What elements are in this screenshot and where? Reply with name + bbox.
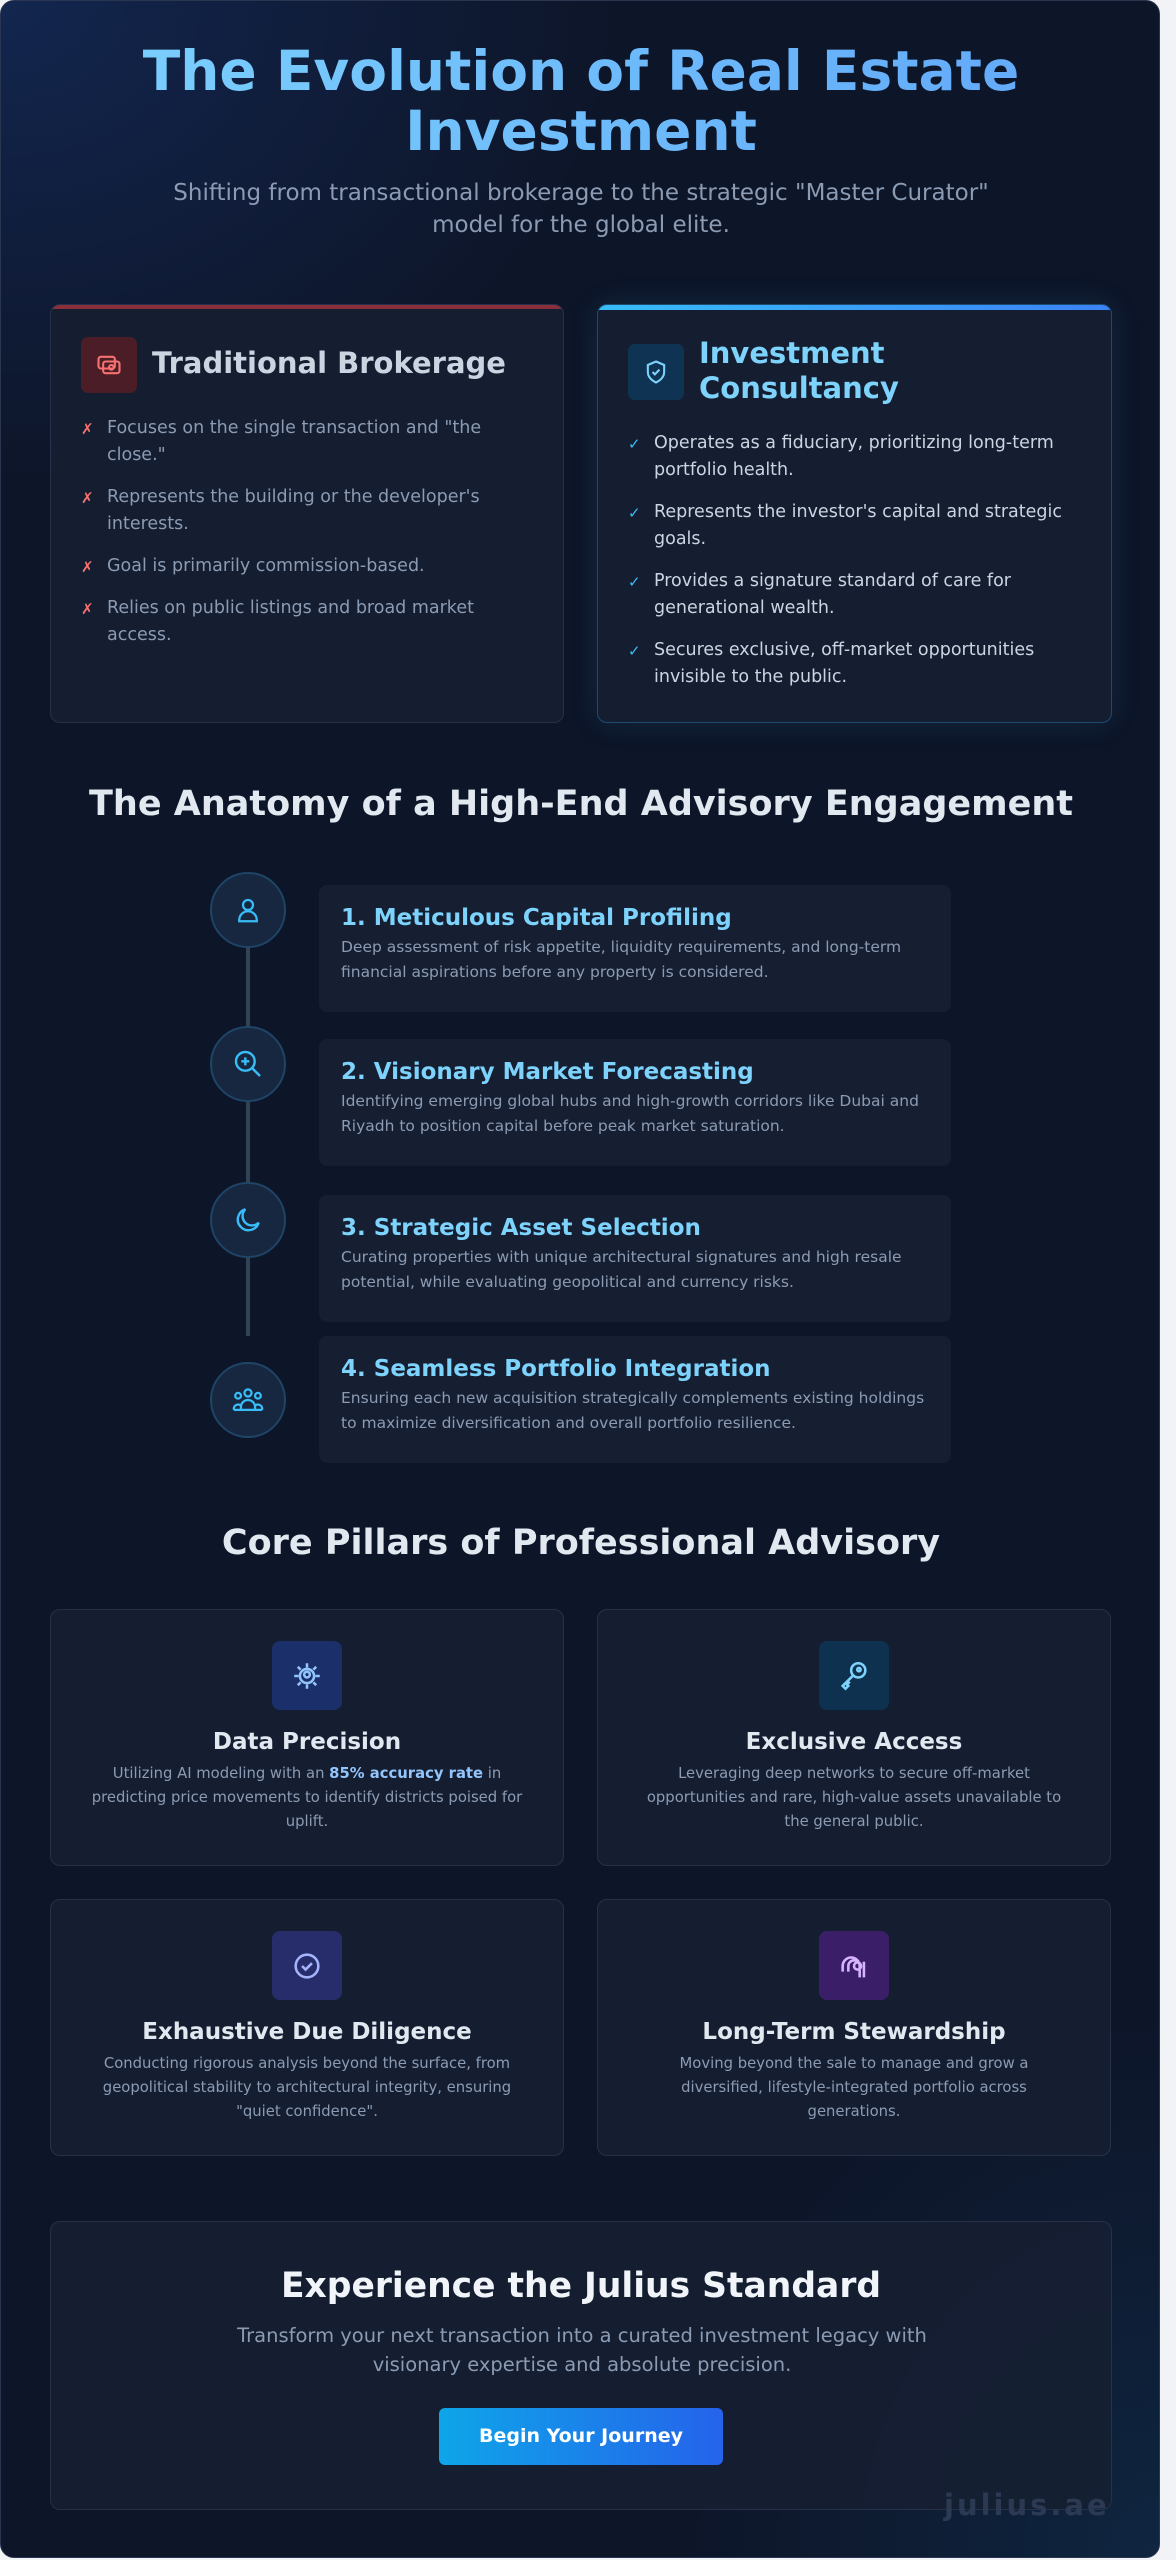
card (319, 1195, 951, 1322)
card: Curating properties with unique architectural signatures and high resale potential, while evaluating geopolitical and currency risks. (341, 1248, 902, 1290)
CTA heading: Experience the Julius Standard (281, 2266, 881, 2306)
list (81, 418, 481, 645)
card (319, 1336, 951, 1463)
list: ✗ (81, 489, 94, 507)
list: ✗ (81, 600, 94, 618)
list: ✓ (628, 573, 641, 591)
pillar: due diligence: geopolitical stability to architectural integrity, ensuring (103, 2079, 511, 2096)
button: Begin Your Journey (479, 2425, 683, 2447)
card: 2. Visionary Market Forecasting (341, 1059, 754, 1085)
card (319, 1039, 951, 1166)
list: Provides a signature standard of care for generational wealth. (654, 571, 1011, 618)
pillar: due diligence: Exhaustive Due Diligence (142, 2019, 472, 2045)
heading: core pillars: Core Pillars of Professional Advisory (222, 1523, 940, 1563)
pillar: stewardship: Long-Term Stewardship (702, 2019, 1006, 2045)
list: Relies on public listings and broad market access. (107, 598, 474, 645)
pillar: stewardship: diversified, lifestyle-integrated portfolio across (681, 2079, 1027, 2096)
list: Represents the building or the developer's interests. (107, 487, 480, 534)
step 2 (210, 1026, 951, 1166)
heading: anatomy: The Anatomy of a High-End Advisory Engagement (89, 784, 1073, 824)
title: Investment (405, 99, 757, 163)
pillar: due diligence (50, 1899, 564, 2156)
pillar: stewardship: generations. (808, 2103, 900, 2120)
heading: Traditional Brokerage (152, 346, 506, 380)
CTA text: Transform your next transaction into a curated investment legacy with visionary expertise and absolute precision. (237, 2324, 927, 2376)
list: ✓ (628, 435, 641, 453)
icon: cash (81, 337, 137, 393)
card: Deep assessment of risk appetite, liquidity requirements, and long-term financial aspirations before any property is considered. (341, 938, 901, 980)
title: The Evolution of Real Estate (143, 39, 1019, 103)
panel: traditional brokerage (50, 304, 564, 723)
title (1, 41, 1161, 161)
list: ✓ (628, 642, 641, 660)
list: Operates as a fiduciary, prioritizing long-term portfolio health. (654, 433, 1054, 480)
list: Focuses on the single transaction and "the close." (107, 418, 481, 465)
timeline line (246, 931, 250, 1336)
CTA panel (50, 2221, 1112, 2510)
icon: shield (628, 344, 684, 400)
step 4 (210, 1336, 951, 1463)
pillar: data precision: Data Precision (213, 1729, 401, 1755)
pillar: exclusive access: opportunities and rare, high-value assets unavailable to (647, 1789, 1061, 1806)
pillar: due diligence: "quiet confidence". (236, 2103, 378, 2120)
list: Represents the investor's capital and strategic goals. (654, 502, 1062, 549)
card (319, 885, 951, 1012)
panel: investment consultancy (597, 304, 1112, 723)
card: 3. Strategic Asset Selection (341, 1215, 701, 1241)
watermark: julius.ae (944, 2488, 1110, 2522)
pillar: exclusive access: the general public. (784, 1813, 924, 1830)
icon: user (210, 872, 286, 948)
icon: zoom (210, 1026, 286, 1102)
step 3 (210, 1182, 951, 1322)
pillar: data precision: predicting price movements to identify districts poised for (92, 1789, 522, 1806)
icon: key (819, 1641, 889, 1710)
card: Identifying emerging global hubs and high-growth corridors like Dubai and Riyadh to position capital before peak market saturation. (341, 1092, 919, 1134)
list (628, 433, 1062, 687)
pillar: exclusive access: Leveraging deep networks to secure off-market (678, 1765, 1030, 1782)
pillar: exclusive access (597, 1609, 1111, 1866)
subtitle: Shifting from transactional brokerage to the strategic "Master Curator" model for the global elite. (173, 180, 989, 238)
card: Ensuring each new acquisition strategically complements existing holdings to maximize diversification and overall portfolio resilience. (341, 1389, 924, 1432)
list: Secures exclusive, off-market opportunities invisible to the public. (654, 640, 1034, 687)
pillar: exclusive access: Exclusive Access (746, 1729, 962, 1755)
heading: Investment (699, 336, 885, 370)
icon: check circle (272, 1931, 342, 2000)
list: Goal is primarily commission-based. (107, 556, 425, 576)
icon: chip (272, 1641, 342, 1710)
icon: moon (210, 1182, 286, 1258)
pillar: data precision (50, 1609, 564, 1866)
list: ✗ (81, 558, 94, 576)
card: 4. Seamless Portfolio Integration (341, 1356, 771, 1382)
pillar: stewardship: Moving beyond the sale to manage and grow a (680, 2055, 1028, 2072)
pillar: data precision: uplift. (286, 1813, 328, 1830)
pillar: stewardship (597, 1899, 1111, 2156)
button (439, 2408, 723, 2465)
list: ✓ (628, 504, 641, 522)
icon: group (210, 1362, 286, 1438)
card: 1. Meticulous Capital Profiling (341, 905, 732, 931)
heading (699, 336, 899, 405)
heading: Consultancy (699, 371, 899, 405)
list: ✗ (81, 420, 94, 438)
icon: plant (819, 1931, 889, 2000)
step 1 (210, 872, 951, 1012)
pillar: data precision: Utilizing AI modeling with an 85% accuracy rate in (113, 1765, 501, 1782)
pillar: due diligence: Conducting rigorous analysis beyond the surface, from (104, 2055, 510, 2072)
